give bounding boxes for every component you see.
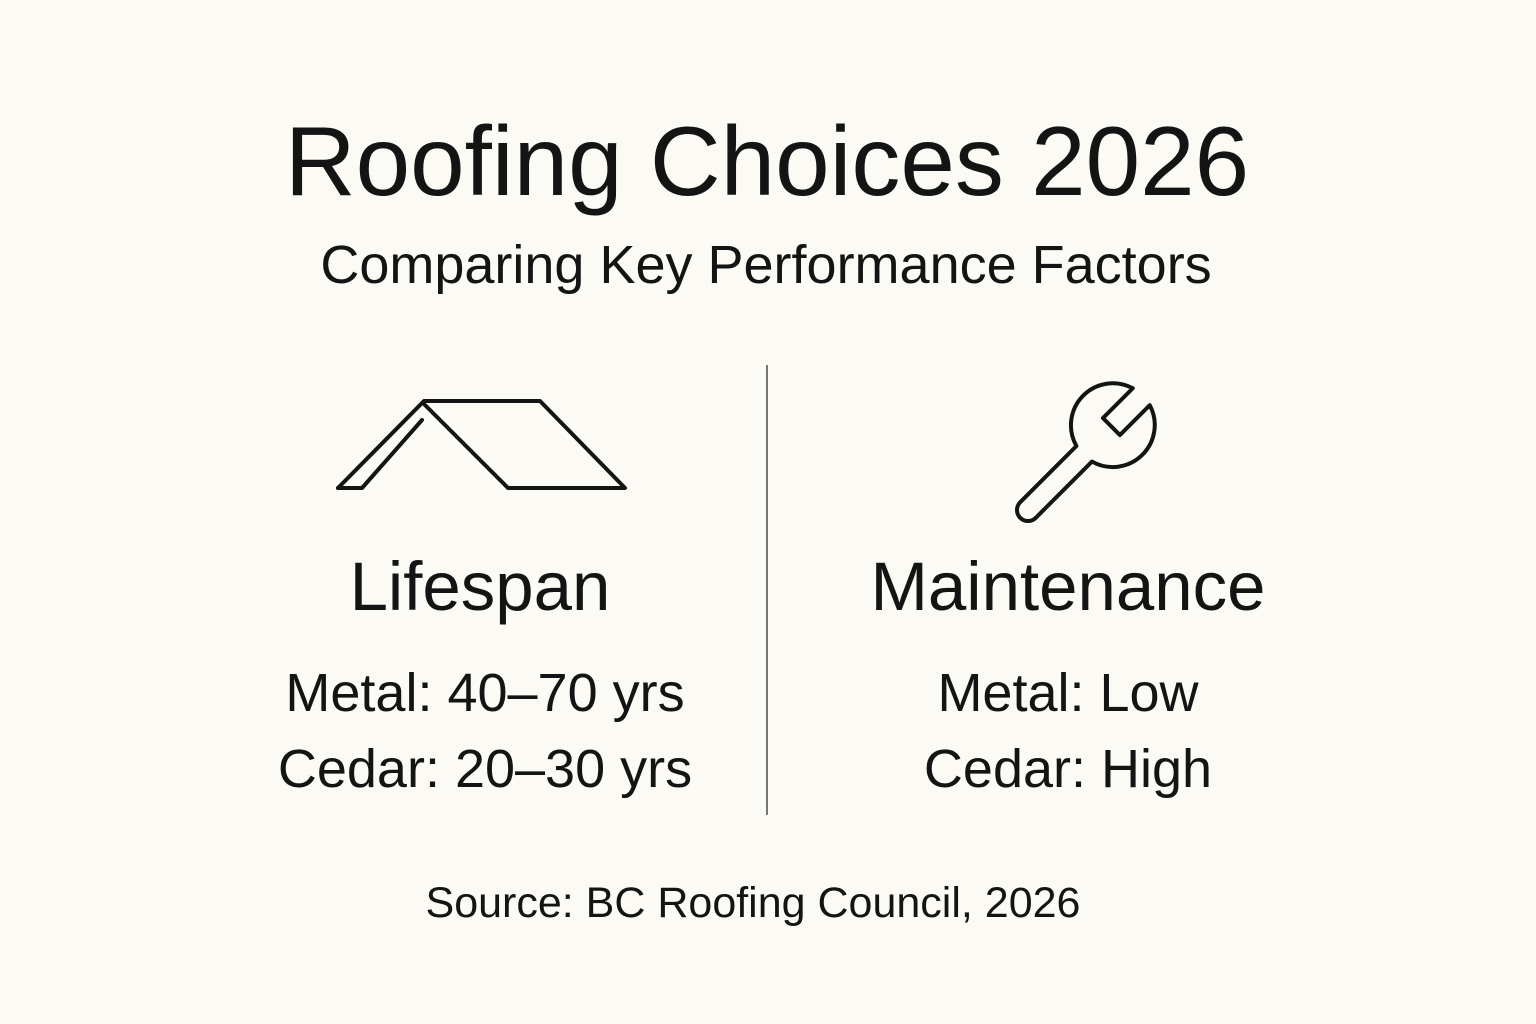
text: maintenance values: Cedar: High [924, 739, 1212, 799]
panel: lifespan [278, 399, 692, 799]
subtitle: Comparing Key Performance Factors [320, 235, 1212, 295]
text: maintenance values [924, 663, 1212, 799]
icon: wrench [1015, 381, 1157, 523]
divider [766, 365, 768, 815]
source note: Source: BC Roofing Council, 2026 [426, 879, 1080, 927]
text: lifespan values: Cedar: 20–30 yrs [278, 739, 692, 799]
title: Roofing Choices 2026 [285, 106, 1249, 216]
text: lifespan values [278, 663, 692, 799]
text: lifespan values: Metal: 40–70 yrs [285, 663, 685, 723]
heading: Maintenance: Maintenance [870, 548, 1266, 625]
text: maintenance values: Metal: Low [937, 663, 1199, 723]
icon: roof [336, 399, 628, 490]
heading: Lifespan: Lifespan [350, 548, 610, 625]
panel: maintenance [870, 381, 1266, 799]
